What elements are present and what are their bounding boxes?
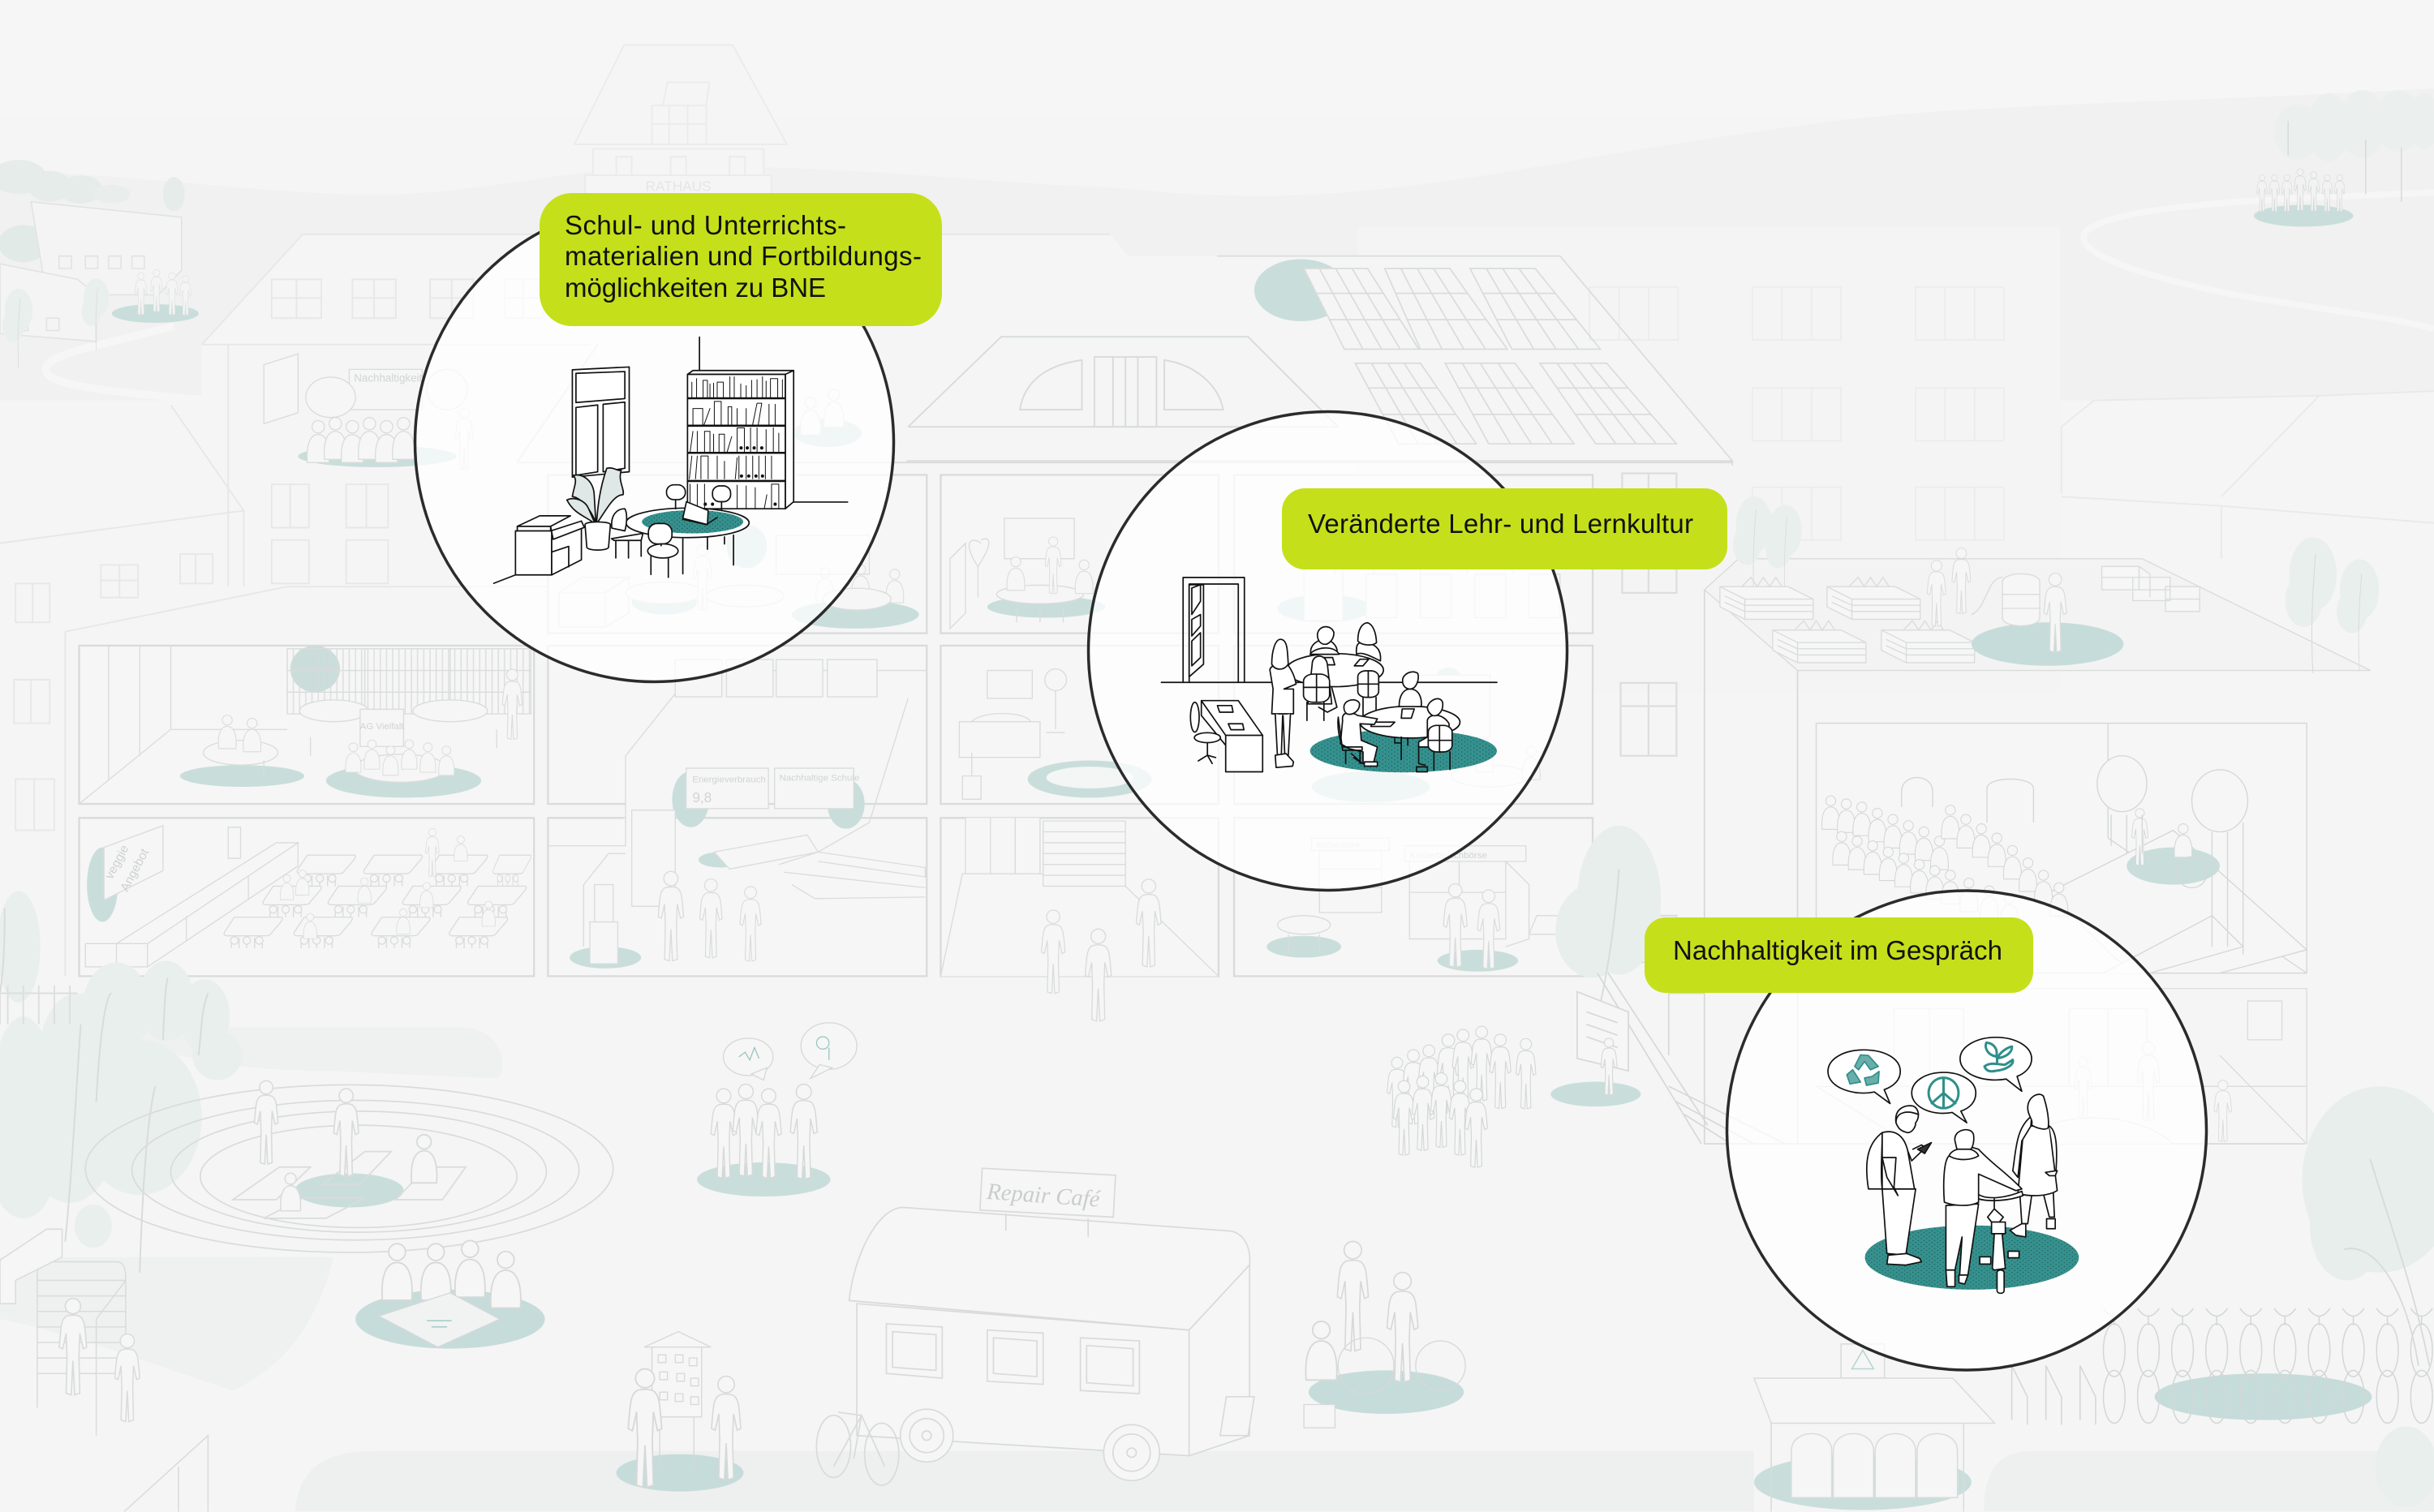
bin shelter with recycling sign bbox=[1754, 1344, 1995, 1512]
room: lounge bbox=[959, 669, 1152, 799]
outdoor tree cluster left bbox=[0, 891, 242, 1273]
room: stairwell and people bbox=[940, 818, 1219, 1021]
crowd near entrance bbox=[1387, 1026, 1536, 1167]
room: teacher with board bbox=[950, 518, 1105, 629]
ramp with sign and right wing bbox=[1550, 590, 2305, 1144]
repair group with bicycle bbox=[1304, 1241, 1465, 1428]
speech bubble: seedling bbox=[1960, 1037, 2032, 1091]
panel: Schul- und Unterrichtsmaterialien bbox=[415, 193, 942, 681]
people with speech bubbles bbox=[697, 1023, 857, 1196]
room: posters and stairs: Energieverbrauch bbox=[692, 775, 766, 784]
label: Veränderte Lehr- und Lernkultur bbox=[1282, 488, 1727, 569]
illustration: study room with bookshelf, table and copier bbox=[494, 337, 848, 583]
circle: lens 3 bbox=[1727, 891, 2207, 1370]
label: Nachhaltigkeit im Gespräch bbox=[1645, 917, 2033, 993]
auditorium room bbox=[1817, 724, 2307, 973]
climbing wall bbox=[0, 1229, 208, 1512]
illustration: classroom with group tables and door bbox=[1161, 578, 1497, 772]
panel: Veränderte Lehr- und Lernkultur bbox=[1089, 412, 1727, 891]
room: posters and stairs bbox=[548, 659, 927, 969]
room: cafeteria: Angebot bbox=[118, 846, 153, 894]
classrooms grid bbox=[80, 475, 1593, 976]
top-left houses and group bbox=[0, 177, 199, 368]
solar roof with panels bbox=[906, 256, 1732, 466]
person: woman with apron bbox=[2010, 1094, 2058, 1237]
insect hotel with people bbox=[617, 1332, 743, 1492]
top-right group on hill bbox=[2254, 90, 2434, 226]
left side building bbox=[0, 405, 548, 976]
room: library: AG Vielfalt bbox=[360, 722, 404, 732]
big tree right edge bbox=[2302, 1086, 2434, 1507]
room: lower right shop and kiosk: Bücherstube bbox=[1316, 841, 1360, 850]
label: Schul- und Unterrichtsmaterialien bbox=[540, 193, 942, 326]
room: lower right shop and kiosk: Kindertauschbörse bbox=[1409, 851, 1487, 861]
person: man with phone and backpack bbox=[1867, 1106, 1931, 1265]
circle: lens 2 bbox=[1089, 412, 1567, 891]
label: Schul- und Unterrichtsmaterialien: materialien und Fortbildungs- bbox=[565, 241, 922, 271]
bicycle parking bbox=[2012, 1308, 2432, 1424]
label: Veränderte Lehr- und Lernkultur: Veränderte Lehr- und Lernkultur bbox=[1308, 509, 1693, 539]
classroom with presentation: Nachhaltigkeit bbox=[354, 372, 423, 384]
room: upper middle with copier and table bbox=[559, 389, 919, 629]
room: posters and stairs: 9,8 bbox=[692, 789, 712, 805]
label: Schul- und Unterrichtsmaterialien: Schul- und Unterrichts- bbox=[565, 210, 846, 240]
room: cafeteria bbox=[85, 826, 531, 967]
room: cafeteria: veggie bbox=[102, 843, 131, 882]
room: posters and stairs: Nachhaltige Schule bbox=[779, 773, 859, 783]
label: Nachhaltigkeit im Gespräch: Nachhaltigkeit im Gespräch bbox=[1673, 935, 2002, 965]
back building windows bbox=[1589, 287, 2004, 540]
panel: Nachhaltigkeit im Gespräch bbox=[1645, 891, 2207, 1370]
room: lower right shop and kiosk bbox=[1266, 838, 1576, 972]
circle: lens 1 bbox=[415, 203, 894, 681]
speech bubble: recycling bbox=[1828, 1050, 1900, 1103]
side windows bbox=[1620, 474, 1676, 962]
central dormer with arched windows bbox=[517, 337, 1732, 462]
repair cafe wagon bbox=[816, 1168, 1254, 1485]
rooftop garden bbox=[1705, 496, 2379, 673]
person: rear view with bicycle bbox=[1944, 1130, 2023, 1293]
lower right gym room bbox=[1817, 989, 2307, 1144]
room: rows of sinks and plants bbox=[1278, 535, 1560, 802]
yoga circle bbox=[85, 1080, 613, 1252]
label: Schul- und Unterrichtsmaterialien: möglichkeiten zu BNE bbox=[565, 273, 826, 303]
left upper building bbox=[202, 234, 1110, 586]
hills bbox=[0, 0, 2434, 450]
classroom with presentation bbox=[264, 354, 473, 470]
rathaus: RATHAUS bbox=[646, 178, 712, 194]
illustration: three people talking with bicycle bbox=[1828, 1037, 2079, 1293]
right houses bbox=[2062, 391, 2434, 559]
repair cafe wagon: Repair Café bbox=[985, 1179, 1102, 1213]
group around map bbox=[355, 1240, 545, 1349]
room: library bbox=[80, 646, 531, 804]
tree by entrance bbox=[1555, 826, 1661, 1024]
rathaus bbox=[574, 45, 787, 194]
speech bubble: peace bbox=[1912, 1072, 1976, 1123]
